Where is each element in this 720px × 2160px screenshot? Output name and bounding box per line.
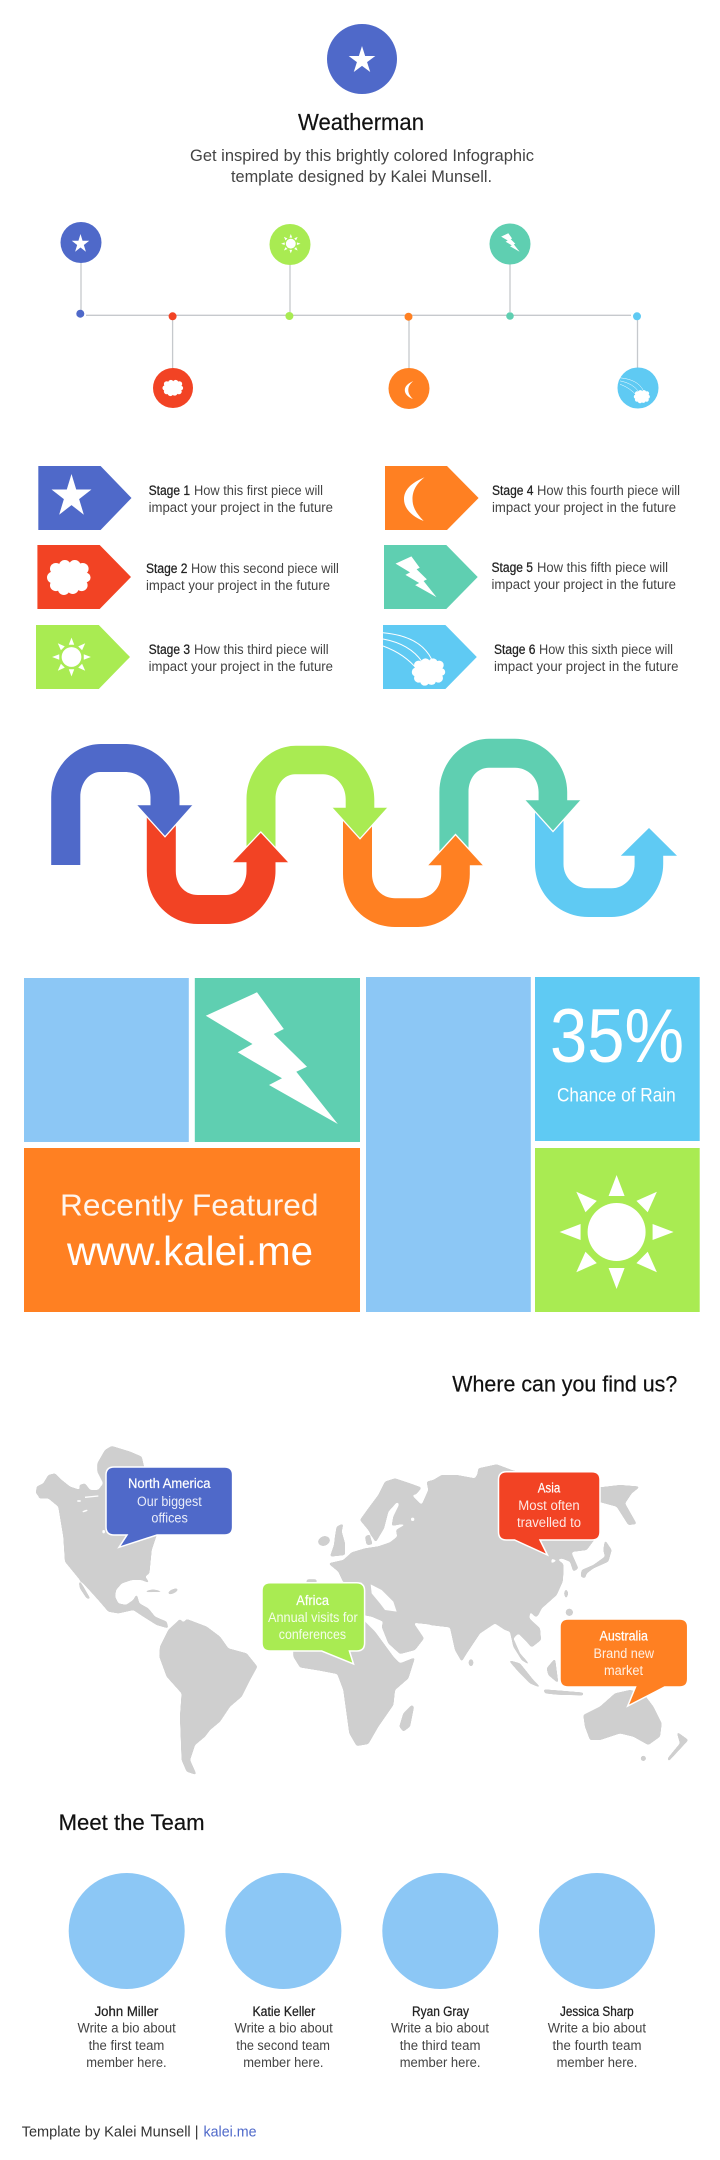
team member: ryan gray: the third team <box>400 2038 480 2053</box>
timeline icon: sun <box>270 224 310 265</box>
callout: australia: Australia <box>600 1629 648 1644</box>
team member: jessica sharp: Write a bio about <box>548 2021 646 2036</box>
tile: chance of rain <box>535 977 700 1141</box>
team member: ryan gray: member here. <box>400 2055 480 2070</box>
callout: north america: North America <box>128 1476 211 1491</box>
team member: jessica sharp: the fourth team <box>552 2038 642 2053</box>
team member: john miller: John Miller <box>95 2004 159 2019</box>
stage 2 text <box>146 561 339 593</box>
stage 3 text <box>149 642 333 674</box>
tile: chance of rain: 35% <box>550 994 684 1079</box>
subtitle: template designed by Kalei Munsell. <box>231 168 492 186</box>
tile: lightning <box>195 978 360 1142</box>
stage 1 arrow <box>38 466 131 530</box>
callout: australia <box>560 1619 688 1706</box>
stage 3 text: Stage 3 <box>149 642 190 657</box>
stage 6 arrow <box>383 625 477 689</box>
stage 3 arrow <box>36 625 130 689</box>
stage 4 text: How this fourth piece will <box>537 483 680 498</box>
stage 1 text <box>149 483 333 515</box>
callout: asia <box>498 1472 600 1555</box>
tile: recently featured: www.kalei.me <box>66 1228 313 1274</box>
team member: jessica sharp <box>539 1873 655 2070</box>
timeline icon: cloud <box>153 368 193 408</box>
serpentine arrows chart <box>51 739 677 927</box>
stage 5 text: impact your project in the future <box>492 577 676 592</box>
stage 1 text: How this first piece will <box>194 483 323 498</box>
team member: john miller <box>69 1873 185 2070</box>
callout: africa: Africa <box>296 1593 329 1608</box>
timeline <box>60 222 658 409</box>
stage 2 text: Stage 2 <box>146 561 188 576</box>
stage 5 text <box>492 560 676 592</box>
stage 5 arrow <box>384 545 478 609</box>
stage 4 text <box>492 483 680 515</box>
stage 4 text: impact your project in the future <box>492 500 676 515</box>
timeline icon: comet <box>618 368 658 408</box>
callout: north america: Our biggest <box>137 1494 202 1509</box>
stage 2 arrow <box>37 545 131 609</box>
stage 6 text: Stage 6 <box>494 642 536 657</box>
tile: sun <box>535 1148 700 1312</box>
callout: asia: Most often <box>518 1498 580 1513</box>
team member: ryan gray <box>382 1873 498 2070</box>
team member: katie keller: member here. <box>243 2055 324 2070</box>
tile: chance of rain: Chance of Rain <box>557 1086 676 1107</box>
callout: australia: Brand new <box>594 1646 654 1661</box>
callout: australia: market <box>604 1663 643 1678</box>
stage 5 text: Stage 5 <box>492 560 533 575</box>
footer credit: kalei.me <box>204 2124 257 2141</box>
stage 6 text: impact your project in the future <box>494 659 678 674</box>
team member: katie keller: Write a bio about <box>234 2021 333 2036</box>
header: star badge <box>327 24 397 94</box>
callout: africa: conferences <box>279 1627 346 1642</box>
team member: jessica sharp: Jessica Sharp <box>560 2004 634 2019</box>
stage 6 text <box>494 642 678 674</box>
heading: meet the team: Meet the Team <box>59 1810 205 1835</box>
callout: africa: Annual visits for <box>268 1610 358 1625</box>
stage 1 text: impact your project in the future <box>149 500 333 515</box>
title: Weatherman <box>298 109 424 135</box>
tile: recently featured: Recently Featured <box>60 1188 318 1223</box>
team member: ryan gray: Ryan Gray <box>412 2004 469 2019</box>
stage 2 text: impact your project in the future <box>146 578 330 593</box>
tile: tall light blue <box>366 977 531 1312</box>
stage 3 text: impact your project in the future <box>149 659 333 674</box>
callout: africa <box>262 1583 365 1664</box>
stage 5 text: How this fifth piece will <box>537 560 668 575</box>
team member: john miller: Write a bio about <box>78 2021 176 2036</box>
stage 6 text: How this sixth piece will <box>539 642 673 657</box>
team member: katie keller: the second team <box>236 2038 330 2053</box>
timeline icon: lightning <box>490 224 530 264</box>
subtitle <box>190 147 534 186</box>
team member: jessica sharp: member here. <box>557 2055 637 2070</box>
timeline icon: moon <box>388 368 430 409</box>
team member: john miller: member here. <box>86 2055 167 2070</box>
heading: where can you find us: Where can you find us? <box>452 1372 677 1397</box>
stage 3 text: How this third piece will <box>194 642 329 657</box>
timeline icon: star <box>60 222 102 263</box>
subtitle: Get inspired by this brightly colored Infographic <box>190 147 534 165</box>
callout: north america <box>106 1467 233 1547</box>
tile: recently featured <box>24 1148 360 1312</box>
stage 1 text: Stage 1 <box>149 483 190 498</box>
team member: ryan gray: Write a bio about <box>391 2021 489 2036</box>
team member: john miller: the first team <box>89 2038 164 2053</box>
stage 4 text: Stage 4 <box>492 483 534 498</box>
callout: north america: offices <box>151 1511 188 1526</box>
team member: katie keller: Katie Keller <box>252 2004 316 2019</box>
tile: light blue <box>24 978 189 1142</box>
stage 4 arrow <box>385 466 479 530</box>
footer credit: Template by Kalei Munsell | <box>22 2124 199 2141</box>
team member: katie keller <box>225 1873 341 2070</box>
callout: asia: travelled to <box>517 1515 581 1530</box>
callout: asia: Asia <box>538 1480 561 1495</box>
stage 2 text: How this second piece will <box>191 561 339 576</box>
world map <box>32 1446 688 1775</box>
